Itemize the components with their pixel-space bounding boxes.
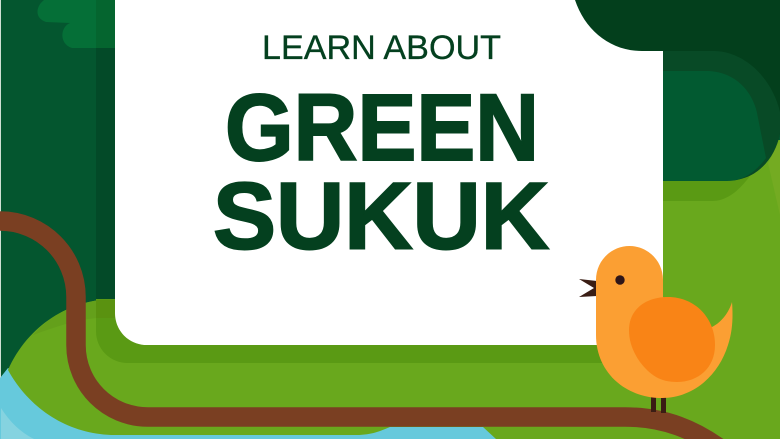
panel shadow overlap <box>96 300 115 318</box>
bird wing <box>629 297 715 382</box>
icon: bird <box>579 246 733 413</box>
left edge sliver <box>0 0 1 439</box>
dark tree canopy <box>575 0 780 181</box>
tree shadow on meadow <box>663 176 750 201</box>
bird legs <box>651 396 666 413</box>
branch <box>0 221 722 439</box>
hill shade <box>33 299 115 335</box>
light water <box>1 408 34 439</box>
water <box>0 368 500 439</box>
meadow highlight <box>768 140 780 215</box>
panel shadow on hill <box>96 299 640 363</box>
right meadow <box>663 140 780 439</box>
white title panel <box>115 0 663 345</box>
heading: green: GREEN <box>225 75 539 181</box>
heading: sukuk: SUKUK <box>213 164 549 270</box>
bird eye <box>615 275 625 285</box>
bush at top left <box>38 0 115 48</box>
tree inner layer <box>663 71 766 181</box>
panel shadow on forest <box>96 48 115 320</box>
bird beak <box>579 279 597 297</box>
panel shadow on bush <box>96 0 115 48</box>
tree mid layer <box>663 51 780 181</box>
bird body <box>596 246 733 398</box>
hill <box>8 299 780 439</box>
heading: learn about: LEARN ABOUT <box>262 29 501 67</box>
